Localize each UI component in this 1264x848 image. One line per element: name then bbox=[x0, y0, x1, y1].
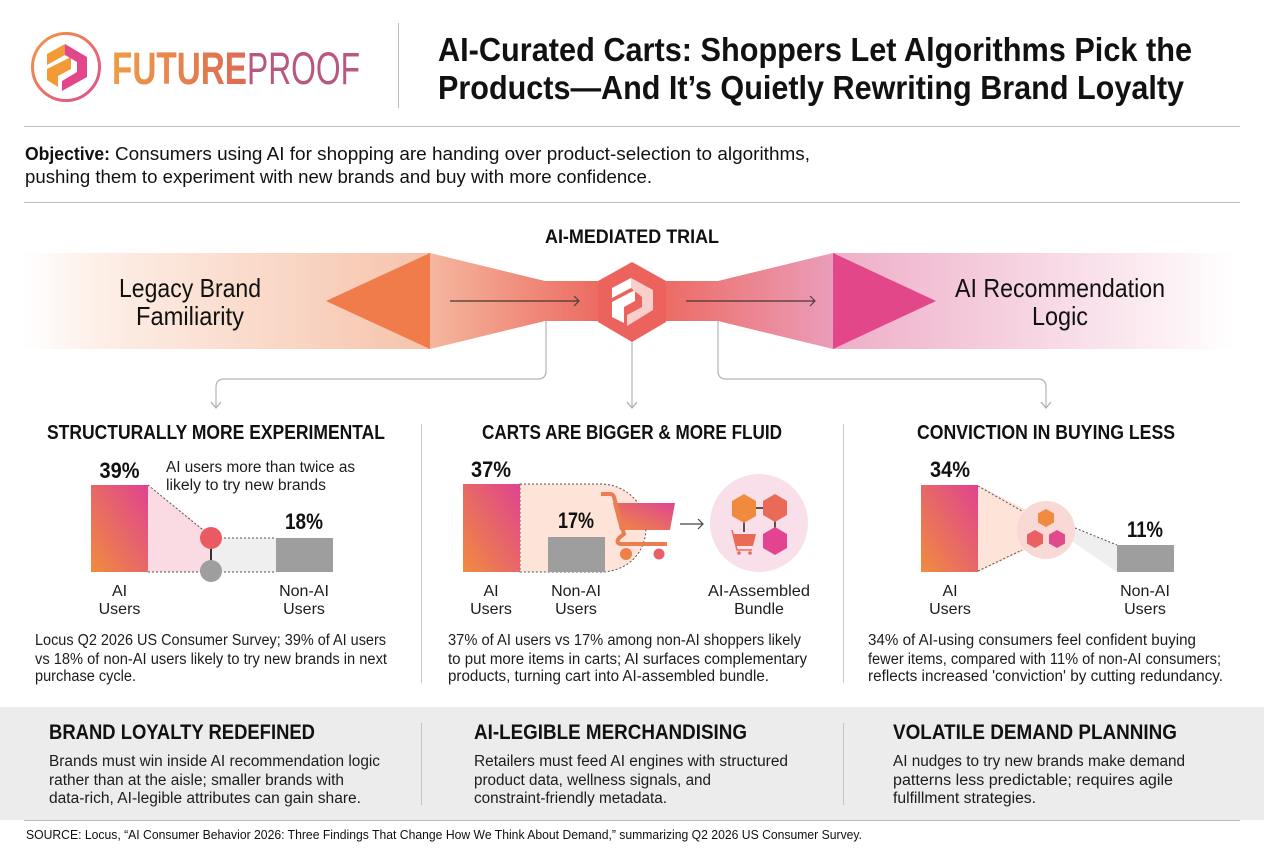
source note: SOURCE: Locus, “AI Consumer Behavior 2026: Three Findings That Change How We Think About Demand,” summarizing Q2 2026 US Consumer Survey. bbox=[26, 827, 862, 842]
panel: conviction in buying less bbox=[868, 422, 1223, 685]
chart: 39% vs 18%: Non-AI bbox=[279, 583, 329, 600]
implication: AI-legible merchandising: Retailers must feed AI engines with structured bbox=[474, 753, 788, 770]
panel: carts are bigger and more fluid bbox=[448, 422, 810, 685]
band: AI recommendation logic: AI Recommendation bbox=[955, 273, 1165, 303]
implication: AI-legible merchandising: constraint-friendly metadata. bbox=[474, 790, 667, 807]
chart: 34% vs 11% bbox=[921, 457, 1174, 618]
logo: Futureproof: FUTURE bbox=[112, 43, 247, 94]
icon: central hexagon bbox=[598, 262, 666, 342]
logo: Futureproof: PROOF bbox=[247, 43, 360, 94]
callout: AI users more than twice as bbox=[166, 459, 355, 476]
objective text: pushing them to experiment with new brands and buy with more confidence. bbox=[25, 166, 652, 187]
implication: brand loyalty redefined: Brands must win inside AI recommendation logic bbox=[49, 753, 380, 770]
panel: structurally more experimental bbox=[35, 422, 388, 685]
implication: volatile demand planning: fulfillment strategies. bbox=[893, 790, 1036, 807]
flow diagram: AI-mediated trial bbox=[22, 227, 1235, 408]
icon: AI-assembled bundle: Bundle bbox=[734, 601, 784, 618]
chart: 37% vs 17%: AI bbox=[483, 583, 499, 600]
description: purchase cycle. bbox=[35, 668, 136, 685]
chart: 37% vs 17%: Users bbox=[470, 601, 512, 618]
description: vs 18% of non-AI users likely to try new brands in next bbox=[35, 651, 388, 668]
arrow: into hub bbox=[450, 300, 579, 302]
description bbox=[448, 632, 807, 685]
band: AI recommendation logic: Logic bbox=[1032, 301, 1088, 331]
icon: AI-assembled bundle bbox=[708, 474, 810, 618]
chart: 37% vs 17% bbox=[463, 457, 646, 618]
chart: 39% vs 18% bbox=[91, 458, 333, 618]
implication: brand loyalty redefined: data-rich, AI-legible attributes can gain share. bbox=[49, 790, 361, 807]
chart: 34% vs 11%: Users bbox=[1124, 601, 1166, 618]
chart: 39% vs 18%: Users bbox=[283, 601, 325, 618]
icon: shopping cart bbox=[601, 494, 675, 560]
band: legacy brand familiarity: Legacy Brand bbox=[119, 273, 261, 303]
band: AI recommendation logic bbox=[660, 253, 1235, 349]
chart: 37% vs 17%: Users bbox=[555, 601, 597, 618]
icon: AI-assembled bundle: AI-Assembled bbox=[708, 583, 810, 600]
heading: AI-mediated trial: AI-MEDIATED TRIAL bbox=[545, 227, 719, 248]
chart: 34% vs 11%: AI bbox=[942, 583, 958, 600]
implication: volatile demand planning: patterns less predictable; requires agile bbox=[893, 772, 1173, 789]
title: Products—And It’s Quietly Rewriting Brand Loyalty bbox=[438, 69, 1185, 106]
chart: 39% vs 18%: 18% bbox=[285, 509, 323, 534]
arrow: out of hub bbox=[686, 300, 815, 302]
connector arrows bbox=[216, 321, 1046, 408]
implication: volatile demand planning: AI nudges to try new brands make demand bbox=[893, 753, 1185, 770]
implication: brand loyalty redefined: BRAND LOYALTY REDEFINED bbox=[49, 721, 315, 744]
objective text: Objective: bbox=[25, 143, 110, 164]
chart: 34% vs 11%: 34% bbox=[930, 457, 970, 482]
description bbox=[868, 632, 1223, 685]
chart: 39% vs 18%: AI bbox=[112, 583, 127, 600]
description: reflects increased 'conviction' by cutting redundancy. bbox=[868, 668, 1223, 685]
chart: 34% vs 11%: 11% bbox=[1127, 517, 1163, 542]
title bbox=[438, 31, 1192, 106]
band: legacy brand familiarity: Familiarity bbox=[136, 301, 244, 331]
description: to put more items in carts; AI surfaces complementary bbox=[448, 651, 807, 668]
implication: AI-legible merchandising: product data, wellness signals, and bbox=[474, 772, 711, 789]
objective text: Consumers using AI for shopping are handing over product-selection to algorithms, bbox=[115, 143, 810, 164]
implication: volatile demand planning: VOLATILE DEMAND PLANNING bbox=[893, 721, 1177, 744]
chart: 37% vs 17%: Non-AI bbox=[551, 583, 601, 600]
title: AI-Curated Carts: Shoppers Let Algorithms Pick the bbox=[438, 31, 1192, 68]
heading: CARTS ARE BIGGER & MORE FLUID bbox=[482, 422, 782, 444]
implication: AI-legible merchandising: AI-LEGIBLE MERCHANDISING bbox=[474, 721, 747, 744]
heading: STRUCTURALLY MORE EXPERIMENTAL bbox=[47, 422, 385, 444]
panel: implications band bbox=[0, 707, 1264, 820]
description: fewer items, compared with 11% of non-AI consumers; bbox=[868, 651, 1221, 668]
band: legacy brand familiarity bbox=[22, 253, 600, 349]
chart: 37% vs 17%: 37% bbox=[471, 457, 511, 482]
heading: CONVICTION IN BUYING LESS bbox=[917, 422, 1175, 444]
arrow bbox=[680, 523, 703, 525]
chart: 37% vs 17%: 17% bbox=[558, 508, 594, 533]
chart: 39% vs 18%: 39% bbox=[100, 458, 140, 483]
description: products, turning cart into AI-assembled bundle. bbox=[448, 668, 769, 685]
logo: Futureproof bbox=[32, 34, 360, 100]
description bbox=[35, 632, 388, 685]
chart: 39% vs 18%: Users bbox=[99, 601, 140, 618]
implication: brand loyalty redefined: rather than at the aisle; smaller brands with bbox=[49, 772, 344, 789]
implication: AI-legible merchandising bbox=[474, 721, 788, 807]
chart: 34% vs 11%: Non-AI bbox=[1120, 583, 1170, 600]
implication: volatile demand planning bbox=[893, 721, 1185, 807]
callout: likely to try new brands bbox=[166, 477, 326, 494]
callout bbox=[166, 459, 355, 494]
chart: 34% vs 11%: Users bbox=[929, 601, 971, 618]
objective text bbox=[25, 143, 810, 187]
description: Locus Q2 2026 US Consumer Survey; 39% of AI users bbox=[35, 632, 386, 649]
implication: brand loyalty redefined bbox=[49, 721, 380, 807]
description: 37% of AI users vs 17% among non-AI shoppers likely bbox=[448, 632, 801, 649]
description: 34% of AI-using consumers feel confident buying bbox=[868, 632, 1196, 649]
